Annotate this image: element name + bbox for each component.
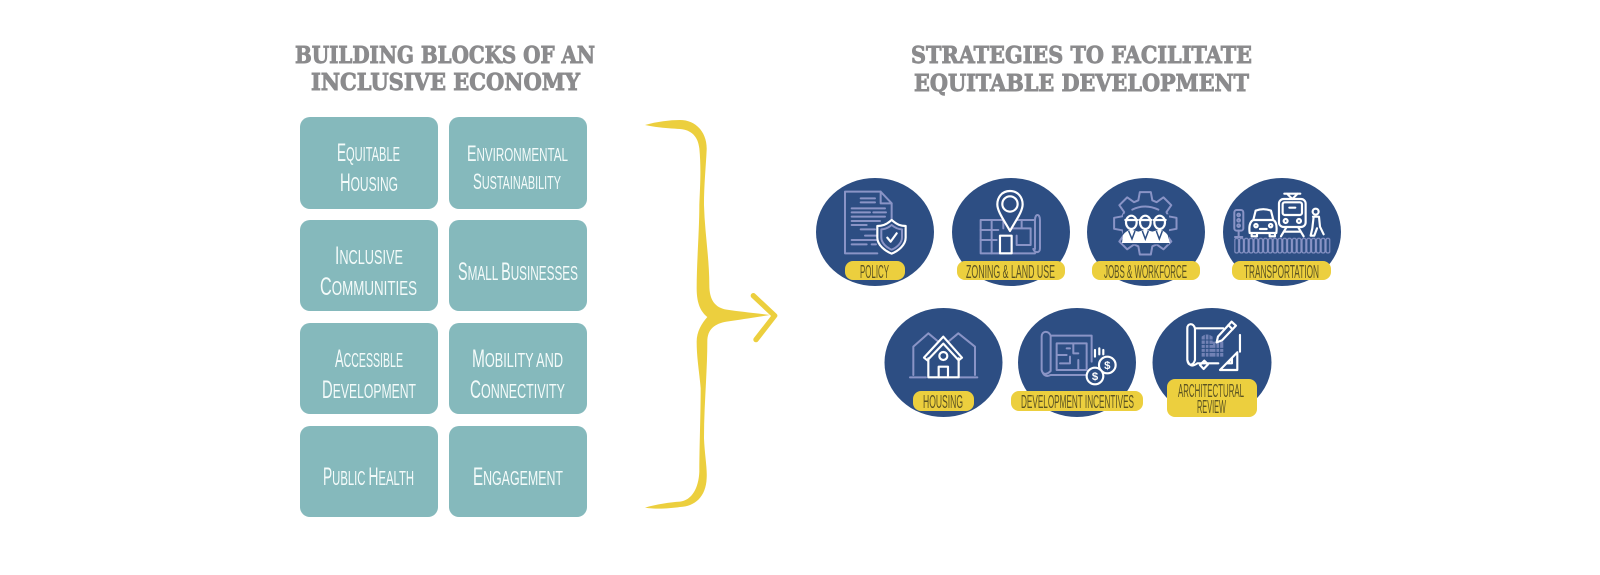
icon: building plan with pencil and set square	[1187, 322, 1240, 370]
heading: building blocks of an inclusive economy	[295, 42, 595, 96]
heading: strategies to facilitate equitable development	[911, 42, 1252, 97]
strategy: transportation	[1223, 178, 1341, 286]
label: jobs and workforce: JOBS & WORKFORCE	[1104, 262, 1187, 282]
heading: strategies to facilitate equitable development: EQUITABLE DEVELOPMENT	[914, 70, 1249, 97]
strategy: jobs and workforce	[1087, 178, 1205, 286]
label: architectural review	[1167, 379, 1257, 417]
icon: workers in gear	[1114, 192, 1177, 255]
block: equitable housing	[300, 117, 438, 209]
block: environmental sustainability: SUSTAINABILITY	[473, 169, 561, 194]
label: housing: HOUSING	[923, 392, 963, 412]
heading: building blocks of an inclusive economy: INCLUSIVE ECONOMY	[311, 69, 581, 96]
heading: strategies to facilitate equitable development: STRATEGIES TO FACILITATE	[911, 42, 1252, 69]
strategy: zoning and land use	[952, 178, 1070, 286]
block: accessible development: DEVELOPMENT	[322, 376, 416, 404]
label: zoning and land use: ZONING & LAND USE	[966, 262, 1055, 282]
panel: building blocks grid	[300, 117, 587, 517]
icon: houses	[910, 333, 977, 377]
block: small businesses: SMALL BUSINESSES	[458, 258, 578, 286]
icon: blueprint with coins: $	[1104, 360, 1111, 372]
arrow: yellow brace pointing right	[645, 120, 775, 509]
icon: map with location pin	[981, 191, 1040, 253]
block: equitable housing: EQUITABLE	[337, 139, 400, 167]
block: mobility and connectivity	[449, 323, 587, 414]
block: mobility and connectivity: CONNECTIVITY	[470, 376, 565, 404]
block: mobility and connectivity: MOBILITY AND	[472, 345, 563, 373]
block: small businesses	[449, 220, 587, 311]
block: public health: PUBLIC HEALTH	[323, 463, 414, 491]
icon: blueprint with coins: $	[1092, 371, 1099, 383]
label: policy: POLICY	[860, 262, 889, 282]
strategy: architectural review	[1152, 308, 1272, 417]
block: equitable housing: HOUSING	[340, 169, 398, 197]
block: environmental sustainability: ENVIRONMENTAL	[467, 141, 568, 166]
strategy: housing	[884, 308, 1002, 417]
label: transportation: TRANSPORTATION	[1244, 262, 1319, 282]
icon: traffic light, car, train, pedestrian	[1234, 194, 1330, 254]
strategy: policy	[816, 178, 934, 286]
block: environmental sustainability	[449, 117, 587, 209]
block: inclusive communities	[300, 220, 438, 311]
label: architectural review: REVIEW	[1197, 397, 1226, 417]
panel: strategy icons: DEVELOPMENT INCENTIVES	[1021, 392, 1134, 412]
block: engagement: ENGAGEMENT	[473, 463, 563, 491]
heading: building blocks of an inclusive economy: BUILDING BLOCKS OF AN	[295, 42, 595, 69]
block: inclusive communities: COMMUNITIES	[320, 273, 417, 301]
block: inclusive communities: INCLUSIVE	[335, 242, 403, 270]
icon: blueprint with coins	[1042, 332, 1116, 384]
block: engagement	[449, 426, 587, 517]
block: public health	[300, 426, 438, 517]
icon: document with shield	[845, 192, 906, 254]
panel: strategy icons	[816, 178, 1341, 417]
strategy: development incentives	[1011, 308, 1143, 417]
block: accessible development	[300, 323, 438, 414]
label: architectural review: ARCHITECTURAL	[1178, 381, 1244, 401]
block: accessible development: ACCESSIBLE	[335, 345, 403, 373]
